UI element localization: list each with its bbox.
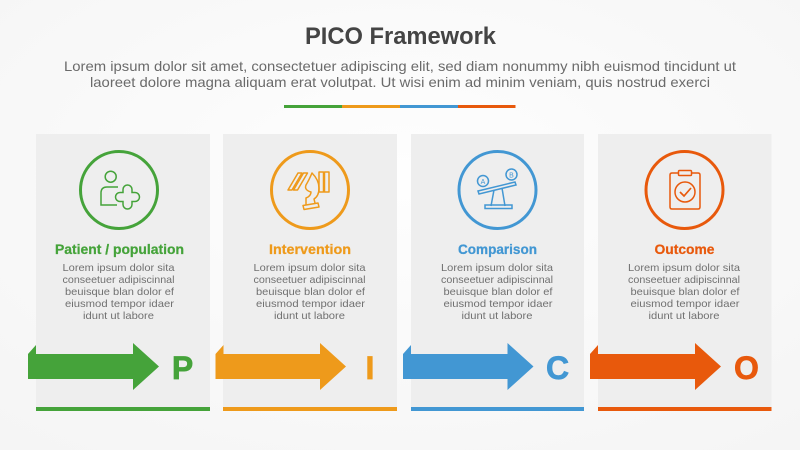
body text: eiusmod tempor idaer xyxy=(65,298,175,310)
bottom bar xyxy=(36,407,210,411)
title: PICO Framework xyxy=(305,23,497,50)
title divider xyxy=(284,105,516,108)
body text: idunt ut labore xyxy=(83,310,154,322)
arrow xyxy=(403,343,534,390)
heading: Outcome xyxy=(654,242,715,257)
heading: Patient / population xyxy=(55,242,184,257)
bottom bar xyxy=(223,407,397,411)
body text xyxy=(62,262,175,322)
intro text: laoreet dolore magna aliquam erat volutpat. Ut wisi enim ad minim veniam, quis nostrud exerci xyxy=(90,74,710,90)
body text: beuisque blan dolor ef xyxy=(256,286,365,298)
icon: balance scale xyxy=(459,152,536,228)
heading: Intervention xyxy=(269,242,351,257)
heading: Comparison xyxy=(458,242,537,257)
body text: Lorem ipsum dolor sita xyxy=(254,262,366,274)
panel: intervention xyxy=(216,134,397,411)
card background xyxy=(223,134,397,411)
body text: eiusmod tempor idaer xyxy=(630,298,740,310)
arrow xyxy=(28,343,159,390)
icon: balance scale: A xyxy=(481,179,486,186)
body text: Lorem ipsum dolor sita xyxy=(441,262,553,274)
letter C: C xyxy=(546,350,569,386)
arrow xyxy=(216,343,346,390)
body text: idunt ut labore xyxy=(462,310,533,322)
body text: beuisque blan dolor ef xyxy=(65,286,174,298)
icon: balance scale: B xyxy=(509,172,514,180)
intro text: Lorem ipsum dolor sit amet, consectetuer adipiscing elit, sed diam nonummy nibh euismod tincidunt ut xyxy=(64,58,736,74)
letter P: P xyxy=(172,350,193,386)
body text: idunt ut labore xyxy=(648,310,720,322)
body text: Lorem ipsum dolor sita xyxy=(62,262,175,274)
panel: patient xyxy=(28,134,210,411)
body text xyxy=(254,262,366,322)
letter I: I xyxy=(366,350,374,386)
body text xyxy=(628,262,740,322)
body text: idunt ut labore xyxy=(274,310,345,322)
icon: hand and dominoes xyxy=(272,152,348,228)
icon: patient with plus xyxy=(80,152,158,228)
body text: beuisque blan dolor ef xyxy=(630,286,740,298)
card background xyxy=(411,134,584,411)
letter O: O xyxy=(734,350,759,386)
body text: conseetuer adipiscinnal xyxy=(254,274,366,286)
arrow xyxy=(590,343,721,390)
body text: conseetuer adipiscinnal xyxy=(441,274,553,286)
body text: conseetuer adipiscinnal xyxy=(628,274,740,286)
body text: conseetuer adipiscinnal xyxy=(62,274,174,286)
body text xyxy=(441,262,553,322)
panel: outcome xyxy=(590,134,772,411)
bottom bar xyxy=(411,407,584,411)
card background xyxy=(598,134,772,411)
body text: Lorem ipsum dolor sita xyxy=(628,262,740,274)
bottom bar xyxy=(598,407,772,411)
icon: clipboard with check xyxy=(646,152,723,228)
card background xyxy=(36,134,210,411)
intro text xyxy=(64,58,736,90)
body text: eiusmod tempor idaer xyxy=(256,298,366,310)
body text: eiusmod tempor idaer xyxy=(444,298,553,310)
panel: comparison xyxy=(403,134,584,411)
body text: beuisque blan dolor ef xyxy=(444,286,553,298)
